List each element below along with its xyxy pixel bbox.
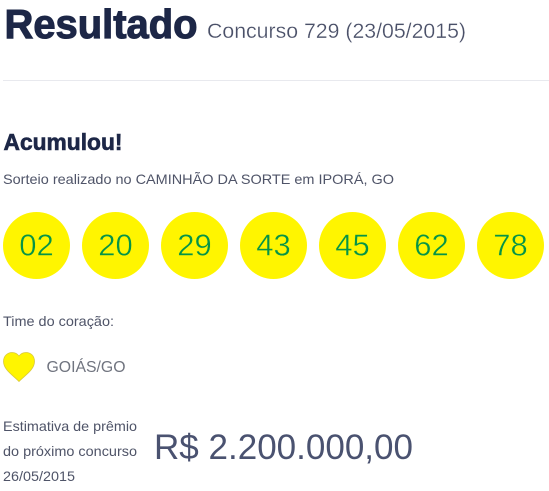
next prize label: 26/05/2015 (3, 468, 75, 484)
favourite team label: Time do coração: (3, 313, 114, 329)
ball 62: 62 (414, 228, 449, 262)
divider (3, 80, 549, 81)
draw location text: Sorteio realizado no CAMINHÃO DA SORTE em IPORÁ, GO (3, 171, 394, 187)
next prize label: do próximo concurso (3, 443, 137, 459)
drawn numbers (3, 212, 544, 279)
heading: Acumulou: Acumulou! (4, 129, 122, 155)
ball 43 (240, 212, 307, 279)
team name: GOIÁS/GO (46, 357, 126, 376)
ball 78 (477, 212, 544, 279)
ball 20 (82, 212, 149, 279)
ball 29: 29 (177, 228, 212, 262)
ball 02: 02 (19, 228, 54, 262)
next prize label (3, 418, 137, 484)
ball 20: 20 (98, 228, 133, 262)
icon: heart (4, 352, 34, 382)
next prize amount: R$ 2.200.000,00 (154, 428, 413, 467)
ball 62 (398, 212, 465, 279)
ball 78: 78 (493, 228, 528, 262)
ball 45: 45 (335, 228, 370, 262)
ball 02 (3, 212, 70, 279)
ball 45 (319, 212, 386, 279)
ball 43: 43 (256, 228, 291, 262)
title: Resultado (4, 1, 198, 47)
subtitle: contest number and date: Concurso 729 (23/05/2015) (207, 20, 466, 43)
next prize label: Estimativa de prêmio (3, 418, 137, 434)
ball 29 (161, 212, 228, 279)
